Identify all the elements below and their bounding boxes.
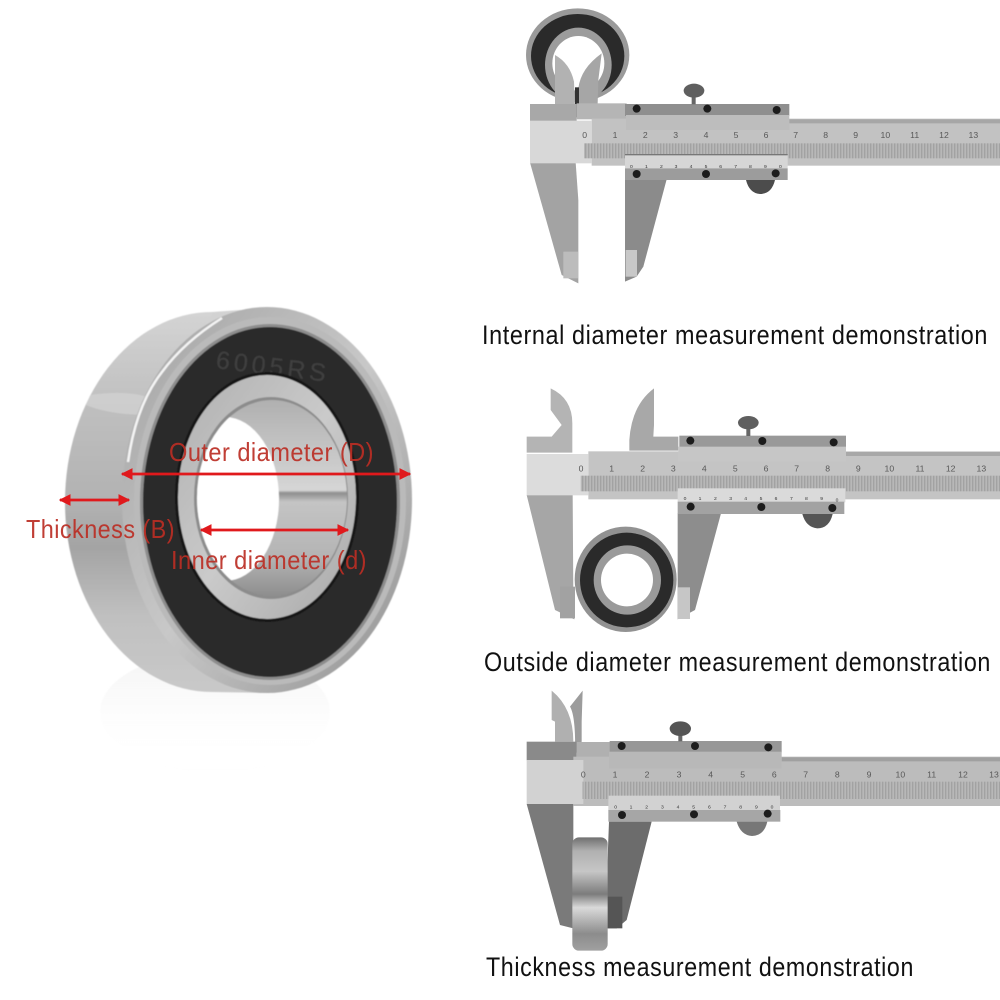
rim highlight bbox=[128, 318, 222, 462]
bearing cylinder body bbox=[65, 312, 359, 692]
scale numbers: 7 bbox=[793, 130, 798, 140]
scale numbers: 12 bbox=[946, 464, 956, 474]
bore wall bbox=[197, 400, 347, 596]
caliper 3: thickness bbox=[527, 691, 1000, 951]
sliding vernier: 8 bbox=[749, 164, 752, 170]
scale numbers bbox=[581, 769, 999, 779]
scale numbers: 0 bbox=[581, 769, 586, 779]
sliding vernier: 6 bbox=[775, 496, 778, 502]
bearing side view bbox=[572, 837, 622, 951]
sliding vernier: 7 bbox=[790, 496, 793, 502]
thumb wheel bbox=[802, 514, 833, 528]
sliding vernier: 1 bbox=[630, 805, 633, 811]
lower jaws bbox=[530, 163, 667, 283]
main scale ticks bbox=[583, 782, 1000, 799]
sliding vernier: 9 bbox=[820, 496, 823, 502]
slider screws bbox=[633, 105, 781, 178]
scale numbers bbox=[579, 464, 986, 474]
fixed head and beam bbox=[530, 103, 1000, 166]
scale numbers: 6 bbox=[764, 464, 769, 474]
sliding vernier: 0 bbox=[614, 805, 617, 811]
lock knob bbox=[670, 721, 691, 741]
slider screws bbox=[686, 437, 838, 512]
black rubber seal bbox=[143, 327, 397, 677]
lower jaws bbox=[527, 804, 652, 928]
scale numbers: 10 bbox=[896, 769, 905, 779]
scale numbers: 2 bbox=[640, 464, 645, 474]
sliding vernier: 7 bbox=[724, 805, 727, 811]
sliding vernier: 1 bbox=[699, 496, 702, 502]
scale numbers: 3 bbox=[677, 769, 682, 779]
sliding vernier: 3 bbox=[675, 164, 678, 170]
scale numbers: 5 bbox=[734, 130, 739, 140]
bearing reflection bbox=[100, 652, 330, 772]
main bearing photo bbox=[64, 306, 412, 694]
scale numbers: 4 bbox=[708, 769, 713, 779]
scale numbers: 13 bbox=[977, 464, 986, 474]
sliding vernier: 0 bbox=[771, 805, 774, 811]
inner diameter label: Inner diameter (d) bbox=[171, 545, 367, 575]
slider screws bbox=[618, 742, 772, 819]
sliding vernier: 3 bbox=[729, 496, 732, 502]
sliding vernier: 6 bbox=[719, 164, 722, 170]
sliding vernier: 9 bbox=[764, 164, 767, 170]
scale numbers: 10 bbox=[881, 130, 890, 140]
sliding vernier: 2 bbox=[660, 164, 663, 170]
scale numbers: 8 bbox=[835, 769, 840, 779]
scale numbers: 6 bbox=[764, 130, 769, 140]
scale numbers: 7 bbox=[794, 464, 799, 474]
scale numbers: 5 bbox=[733, 464, 738, 474]
upper jaws bbox=[527, 388, 678, 453]
scale numbers: 9 bbox=[856, 464, 861, 474]
sliding vernier: 2 bbox=[645, 805, 648, 811]
inner race bbox=[175, 372, 359, 622]
outer diameter label: Outer diameter (D) bbox=[169, 437, 374, 467]
sliding vernier: 0 bbox=[779, 164, 782, 170]
sliding vernier: 2 bbox=[714, 496, 717, 502]
sliding vernier: 5 bbox=[760, 496, 763, 502]
scale numbers: 3 bbox=[671, 464, 676, 474]
thumb wheel bbox=[737, 822, 767, 836]
scale numbers: 8 bbox=[825, 464, 830, 474]
scale numbers: 3 bbox=[673, 130, 678, 140]
lower jaws bbox=[527, 495, 721, 619]
main scale ticks bbox=[584, 143, 1000, 158]
sliding vernier: 1 bbox=[645, 164, 648, 170]
front rim bbox=[122, 307, 412, 693]
caliper 2: outside diameter bbox=[527, 388, 1000, 632]
sliding vernier: 7 bbox=[734, 164, 737, 170]
sliding vernier: 8 bbox=[739, 805, 742, 811]
scale numbers: 5 bbox=[740, 769, 745, 779]
scale numbers: 11 bbox=[915, 464, 925, 474]
sliding vernier: 5 bbox=[705, 164, 708, 170]
scale numbers: 9 bbox=[853, 130, 858, 140]
inner diameter arrow bbox=[201, 529, 348, 531]
seal embossed lettering: 6005RS bbox=[215, 346, 331, 388]
fixed head and beam bbox=[527, 742, 1000, 806]
scale numbers: 4 bbox=[702, 464, 707, 474]
sliding vernier: 4 bbox=[744, 496, 747, 502]
sliding vernier: 5 bbox=[692, 805, 695, 811]
scale numbers: 1 bbox=[609, 464, 614, 474]
measured bearing bbox=[575, 527, 677, 632]
scale numbers: 0 bbox=[579, 464, 584, 474]
sliding vernier bbox=[678, 436, 846, 514]
cylinder highlight bbox=[86, 393, 165, 415]
scale numbers: 7 bbox=[803, 769, 808, 779]
lock knob bbox=[684, 84, 704, 104]
lock knob bbox=[738, 416, 759, 436]
scale numbers: 13 bbox=[989, 769, 999, 779]
sliding vernier: 3 bbox=[661, 805, 664, 811]
thickness arrow bbox=[60, 499, 129, 501]
fixed head and beam bbox=[527, 451, 1000, 499]
scale numbers: 12 bbox=[939, 130, 949, 140]
scale numbers: 8 bbox=[823, 130, 828, 140]
upper jaws bbox=[552, 691, 583, 757]
thumb wheel bbox=[746, 180, 775, 194]
scale numbers: 4 bbox=[704, 130, 709, 140]
thickness label: Thickness (B) bbox=[26, 514, 175, 544]
scale numbers: 1 bbox=[613, 769, 618, 779]
caption 3: Thickness measurement demonstration bbox=[486, 952, 914, 982]
sliding vernier: 9 bbox=[755, 805, 758, 811]
scale numbers: 11 bbox=[910, 130, 919, 140]
white bore opening bbox=[196, 416, 280, 581]
scale numbers: 0 bbox=[582, 130, 587, 140]
sliding vernier: 8 bbox=[805, 496, 808, 502]
small bearing on upper jaws bbox=[526, 8, 629, 102]
sliding vernier bbox=[625, 104, 789, 180]
sliding vernier bbox=[608, 741, 782, 822]
sliding vernier: 4 bbox=[690, 164, 693, 170]
scale numbers: 6 bbox=[772, 769, 777, 779]
sliding vernier: 4 bbox=[677, 805, 680, 811]
scale numbers: 11 bbox=[927, 769, 936, 779]
scale numbers: 9 bbox=[867, 769, 872, 779]
sliding vernier: 0 bbox=[836, 497, 839, 503]
outer diameter arrow bbox=[122, 473, 410, 475]
sliding vernier: 0 bbox=[684, 496, 687, 502]
upper jaws bbox=[555, 53, 602, 117]
scale numbers: 13 bbox=[969, 130, 978, 140]
sliding vernier: 0 bbox=[630, 164, 633, 170]
scale numbers: 2 bbox=[643, 130, 648, 140]
sliding vernier: 6 bbox=[708, 805, 711, 811]
caliper 1: internal diameter bbox=[526, 8, 1000, 283]
scale numbers: 2 bbox=[645, 769, 650, 779]
scale numbers: 1 bbox=[613, 130, 618, 140]
main scale ticks bbox=[581, 476, 1000, 491]
scale numbers: 12 bbox=[958, 769, 968, 779]
scale numbers bbox=[582, 130, 978, 140]
scale numbers: 10 bbox=[885, 464, 894, 474]
